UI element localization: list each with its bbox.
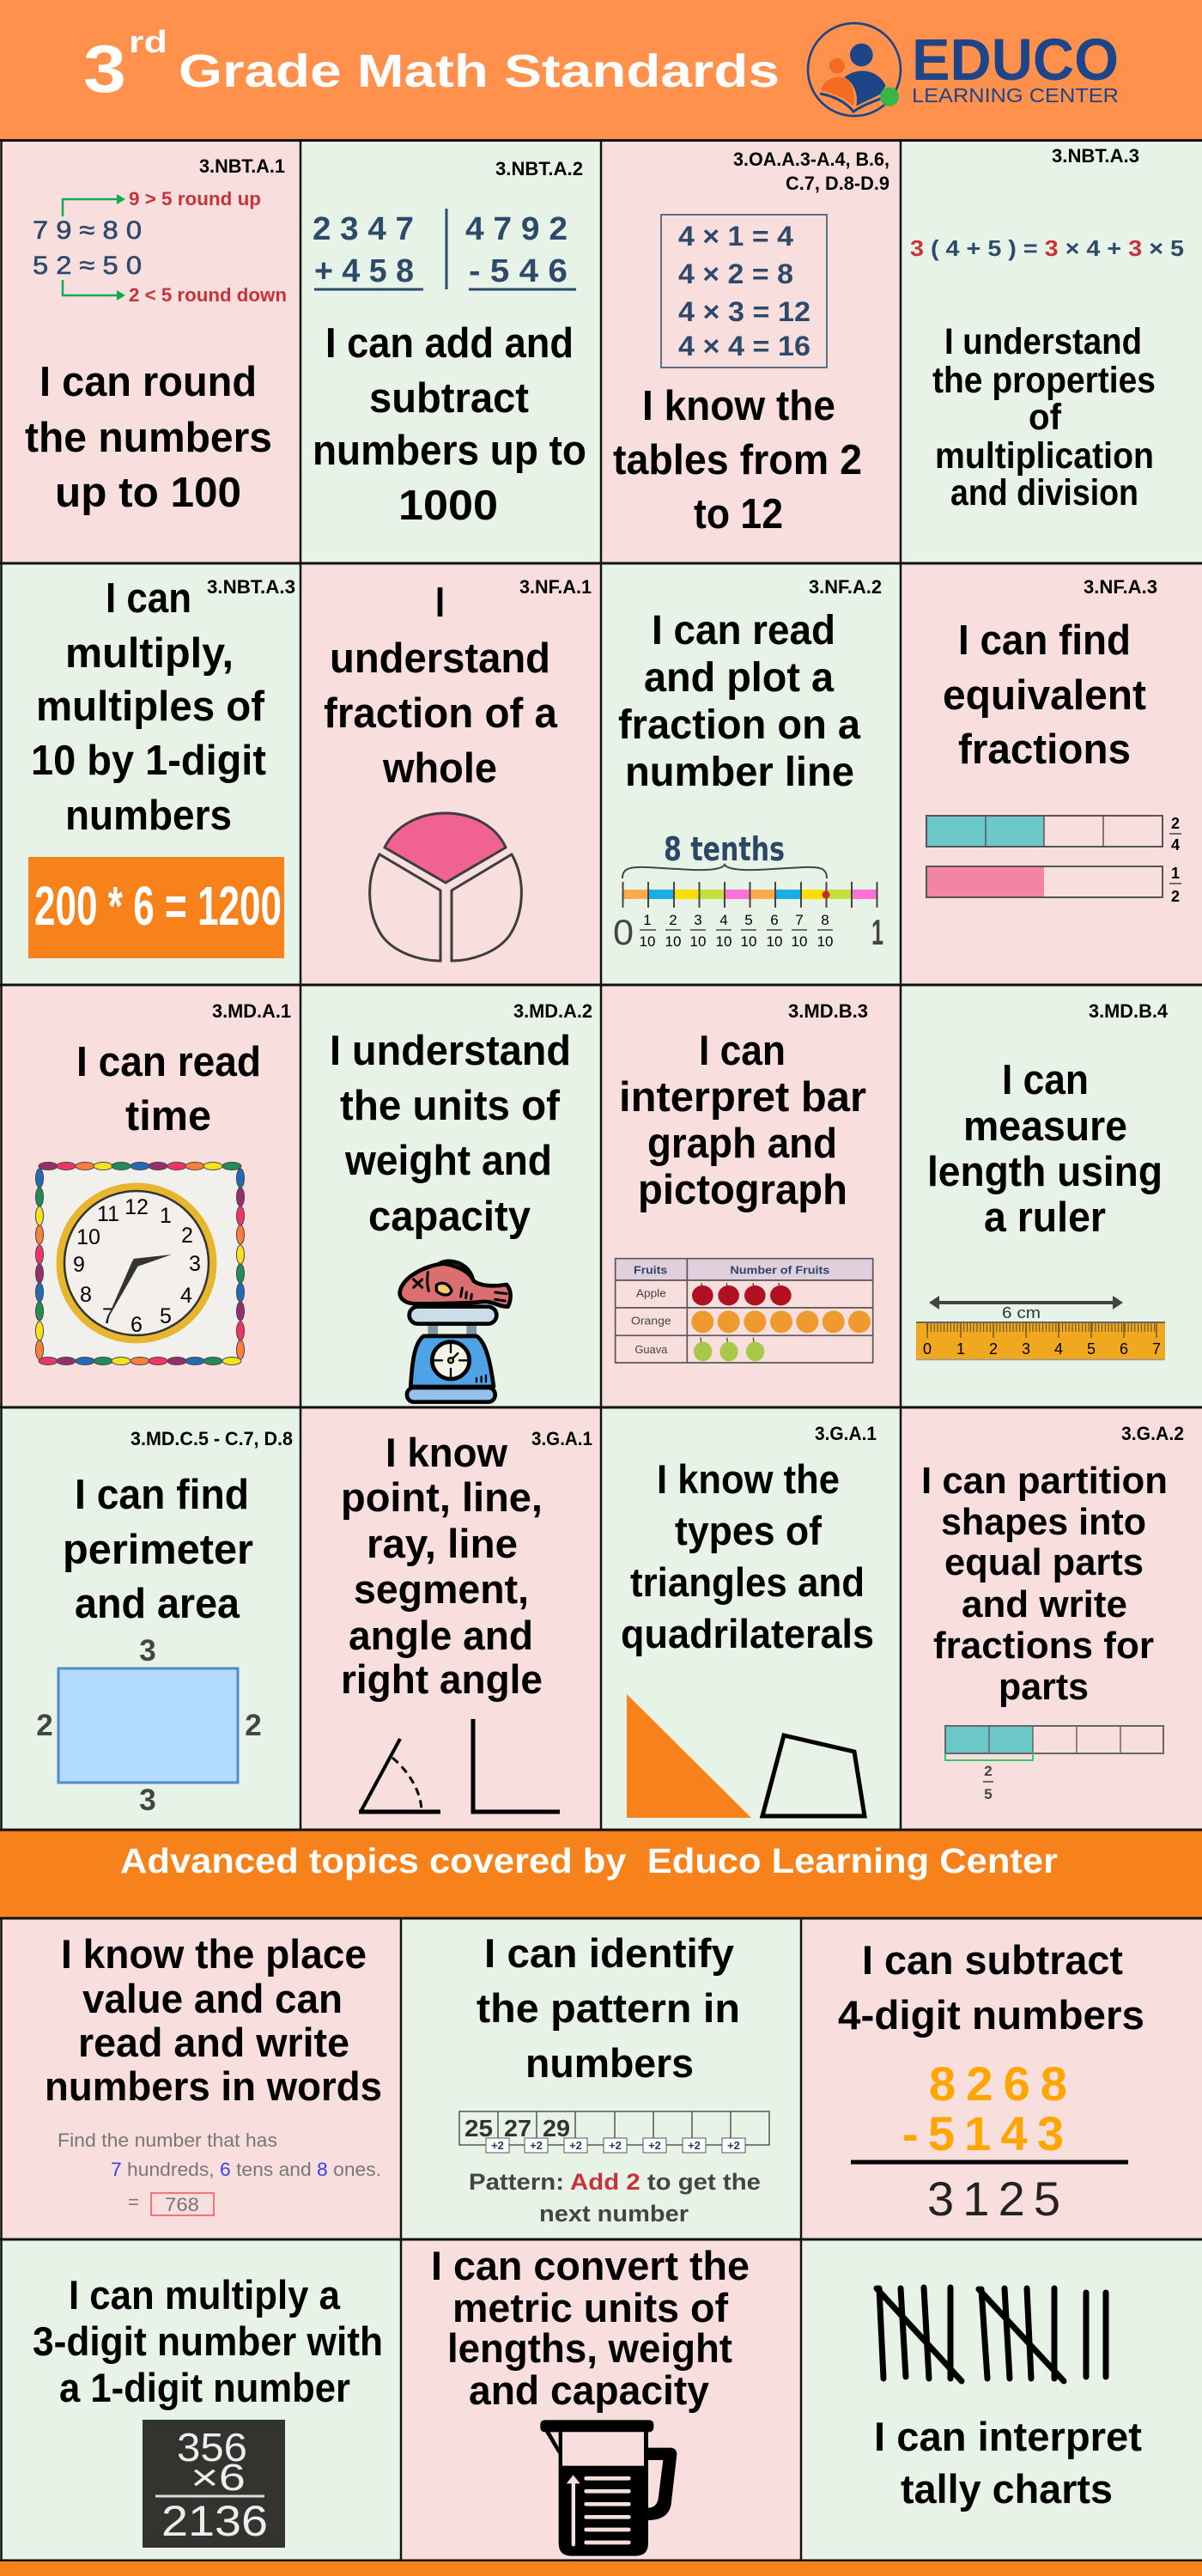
statement: fractions [958,726,1131,773]
panel: multiply 3-digit numbers [0,2239,401,2561]
statement: I can subtract [862,1937,1123,1983]
ruler with 6 cm arrow: 7 [1152,1340,1161,1358]
clock in beaded frame: 11 [97,1202,119,1226]
standard code: 3.NBT.A.3 [207,576,295,598]
times table box [661,215,827,368]
statement: I can [1002,1057,1089,1103]
pictograph table: Fruits [634,1264,667,1276]
statement: I can find [958,617,1131,664]
fraction bars: 4 [1171,836,1180,854]
statement [33,2272,383,2410]
statement: numbers in words [45,2063,382,2109]
standard code: C.7, D.8-D.9 [786,173,889,194]
rounding diagram: 2 < 5 round down [129,284,287,306]
statement: numbers [65,793,232,839]
statement: triangles and [630,1559,865,1605]
statement: quadrilaterals [621,1611,874,1656]
statement [874,2414,1142,2512]
number line diagram: 10 [741,933,756,950]
statement: lengths, weight [447,2325,732,2371]
statement: and division [950,472,1138,513]
statement: tables from 2 [613,437,862,483]
title: 3 [83,31,126,106]
standard code: 3.MD.C.5 - C.7, D.8 [131,1428,293,1449]
statement: I understand [944,321,1142,362]
number line diagram: 0 [613,912,634,952]
number line diagram: 6 [770,912,779,928]
statement: fraction on a [618,702,860,748]
statement: I know the [642,383,835,429]
statement: time [125,1093,211,1139]
statement: ray, line [367,1521,518,1566]
panel: tally charts [801,2239,1202,2561]
statement [932,321,1156,513]
panel: place value [0,1918,401,2239]
standard code: 3.NF.A.1 [519,576,592,598]
clock in beaded frame: 7 [102,1304,114,1328]
number line diagram: 10 [665,933,681,950]
chalkboard sum: ×6 [191,2457,246,2499]
statement [25,359,272,516]
standard code: 3.NF.A.2 [809,576,882,598]
panel: points lines and angles [300,1407,601,1830]
statement: multiplication [935,435,1154,477]
chalkboard sum [143,2420,285,2548]
clock in beaded frame: 10 [76,1225,100,1249]
number line diagram: 8 tenths [664,830,785,868]
orange equation box [28,857,284,958]
labelled rectangle: 2 [245,1709,262,1742]
statement [621,1456,874,1656]
pictograph table [616,1259,873,1363]
panel: fraction of a whole [300,563,601,985]
pictograph table: Number of Fruits [730,1264,829,1276]
standard code: 3.G.A.1 [815,1423,877,1444]
labelled rectangle: 3 [139,1634,156,1668]
statement [330,1028,571,1240]
statement: to 12 [694,491,783,538]
statement: I know the [657,1456,840,1502]
statement [477,1930,740,2086]
statement: a 1-digit number [59,2365,350,2410]
subtraction sum: - 5 1 4 3 [902,2106,1064,2160]
icon: triangle [627,1694,751,1818]
number line diagram: 1 [643,912,652,928]
statement: I can [106,575,191,622]
statement: I can read [652,608,835,653]
pattern strip: +2 [491,2139,504,2152]
standard code: 3.G.A.1 [531,1428,592,1449]
pictograph table: Apple [636,1288,666,1300]
clock in beaded frame: 6 [131,1313,143,1337]
labelled rectangle: 3 [139,1783,156,1817]
statement: equivalent [943,672,1146,719]
statement: metric units of [452,2285,728,2330]
panel: subtract 4-digit numbers [801,1918,1202,2239]
statement: I can interpret [874,2414,1142,2459]
statement [921,1460,1168,1708]
statement: 3-digit number with [33,2318,383,2364]
panel: measure with ruler [902,985,1202,1407]
panel: properties [902,140,1202,563]
labelled rectangle: 2 [36,1709,53,1742]
statement: graph and [647,1121,837,1167]
number line diagram: 10 [792,933,807,950]
ruler with 6 cm arrow: 5 [1087,1340,1096,1358]
statement [63,1472,253,1627]
statement: I can read [76,1039,261,1085]
statement: subtract [369,375,529,422]
fraction bars: 2 [1171,888,1180,905]
number line diagram: 7 [795,912,804,928]
statement: perimeter [63,1527,253,1573]
statement: I understand [330,1028,571,1074]
addition and subtraction sums: - 5 4 6 [469,253,568,289]
statement: read and write [78,2020,349,2065]
addition and subtraction sums: + 4 5 8 [314,253,414,289]
statement: right angle [341,1656,543,1702]
times table box: 4 × 1 = 4 [678,221,793,252]
number line diagram [613,830,883,952]
logo: Educo Learning Center: LEARNING CENTER [912,84,1119,106]
number line diagram: 10 [640,933,655,950]
times table box: 4 × 4 = 16 [678,331,810,361]
times table box: 4 × 3 = 12 [678,296,810,327]
icon: tally marks [877,2287,1106,2381]
icon: angle and right angle [359,1719,560,1812]
statement: number line [625,750,854,795]
clock in beaded frame: 4 [180,1284,192,1308]
statement: measure [963,1103,1127,1150]
statement: I can find [75,1472,249,1518]
panel: number line [601,563,902,985]
pattern strip: +2 [609,2139,622,2152]
statement: I can convert the [431,2243,750,2288]
pattern strip: 29 [543,2115,570,2142]
panel: multiply multiples of 10 [0,563,300,985]
ruler with 6 cm arrow: 6 cm [1002,1304,1041,1321]
clock in beaded frame: 12 [124,1195,149,1219]
ruler with 6 cm arrow: 1 [956,1340,965,1358]
statement: a ruler [984,1194,1106,1241]
statement: capacity [368,1194,531,1240]
statement: of [1029,397,1062,438]
place value question: 768 [165,2194,199,2215]
statement: weight and [344,1138,552,1184]
standard code [733,149,889,194]
statement [613,383,862,538]
statement: understand [330,635,550,682]
number line diagram: 5 [744,912,753,928]
rounding diagram: 9 > 5 round up [129,188,261,210]
standard code: 3.MD.B.3 [788,1000,868,1022]
statement: whole [382,745,497,792]
statement: tally charts [901,2466,1113,2512]
statement: I can partition [921,1460,1168,1502]
statement [618,608,860,795]
statement [76,1039,261,1139]
pattern strip [459,2111,769,2153]
header banner [0,0,1202,140]
pictograph table: Guava [634,1344,668,1356]
addition and subtraction sums: 2 3 4 7 [313,211,414,247]
clock in beaded frame [36,1163,244,1365]
clock in beaded frame: 8 [80,1283,92,1307]
statement: I know [385,1430,507,1475]
statement: and write [962,1583,1127,1625]
panel: perimeter and area [0,1407,300,1830]
partitioned bar with two fifths [945,1726,1163,1802]
ruler with 6 cm arrow: 6 [1120,1340,1128,1358]
standard code: 3.OA.A.3-A.4, B.6, [733,149,889,170]
panel: read time [0,985,300,1407]
statement: I can [699,1028,786,1074]
statement: the numbers [25,415,272,461]
standard code: 3.NBT.A.2 [495,158,583,179]
subtraction sum [851,2057,1128,2226]
title: Grade Math Standards [179,46,780,97]
pattern caption: next number [539,2201,689,2227]
statement: the properties [932,360,1156,401]
statement [313,320,586,529]
partitioned bar with two fifths: 2 [984,1763,993,1779]
distributive equation: 3 ( 4 + 5 ) = 3 × 4 + 3 × 5 [910,235,1184,261]
statement: value and can [82,1976,343,2021]
statement: multiples of [36,683,265,730]
standard code: 3.MD.A.1 [212,1000,291,1022]
statement: shapes into [941,1501,1146,1543]
clock in beaded frame: 5 [160,1304,172,1328]
statement: I can identify [484,1930,734,1976]
ruler with 6 cm arrow: 2 [989,1340,998,1358]
statement [943,617,1146,773]
chalkboard sum: 2136 [161,2497,268,2545]
statement [324,580,558,792]
title: rd [129,24,167,59]
statement: and capacity [469,2367,709,2413]
rounding diagram: 7 9 ≈ 8 0 [33,216,142,245]
pattern strip: 27 [504,2115,531,2142]
statement: 4-digit numbers [838,1992,1144,2038]
panel: bar graph and pictograph [601,985,902,1407]
number line diagram: 10 [690,933,706,950]
panel: partition shapes [902,1407,1202,1830]
panel: equivalent fractions [902,563,1202,985]
statement: I can add and [325,320,574,367]
panel: convert metric units [401,2239,801,2561]
rounding diagram: 5 2 ≈ 5 0 [33,252,142,280]
number line diagram: 4 [719,912,728,928]
panel: add and subtract [300,140,601,563]
pattern caption [469,2169,761,2227]
fraction bars: 1 [1171,865,1180,882]
statement: types of [675,1508,822,1553]
statement: parts [999,1666,1089,1708]
statement: angle and [349,1613,533,1658]
clock in beaded frame: 9 [73,1253,85,1277]
pie with one third shaded [370,813,521,961]
addition and subtraction sums: 4 7 9 2 [465,211,568,247]
statement [838,1937,1144,2038]
ruler with 6 cm arrow: 3 [1022,1340,1030,1358]
statement [619,1028,866,1213]
number line diagram: 1 [871,912,883,952]
place value question [58,2129,381,2215]
statement: I can round [39,359,257,405]
statement [431,2243,750,2413]
statement: equal parts [944,1541,1144,1583]
orange equation box: 200 * 6 = 1200 [34,875,282,937]
standard code: 3.G.A.2 [1121,1423,1184,1444]
standard code: 3.NF.A.3 [1084,576,1157,598]
number line diagram: 10 [767,933,782,950]
statement: multiply, [65,630,234,677]
fraction bars: 2 [1171,815,1180,832]
number line diagram: 10 [716,933,732,950]
icon: fish on kitchen scale [400,1261,511,1402]
addition and subtraction sums [313,209,576,289]
labelled rectangle [36,1634,262,1817]
statement: numbers [525,2040,694,2086]
standard code: 3.MD.A.2 [513,1000,592,1022]
panel: round numbers [0,140,300,563]
number line diagram: 3 [694,912,702,928]
statement: the units of [340,1083,561,1129]
statement: point, line, [341,1474,543,1520]
partitioned bar with two fifths: 5 [984,1786,993,1802]
statement [927,1057,1163,1241]
standard code: 3.NBT.A.3 [1052,145,1139,167]
panel: number patterns [401,1918,801,2239]
ruler with 6 cm arrow [916,1296,1165,1360]
rounding diagram [33,188,287,306]
standard code: 3.NBT.A.1 [199,155,285,177]
place value question: 7 hundreds, 6 tens and 8 ones. [111,2159,381,2180]
panel: triangles and quadrilaterals [601,1407,902,1830]
statement: and plot a [644,655,834,701]
statement: 1000 [398,483,498,529]
ruler with 6 cm arrow: 4 [1054,1340,1063,1358]
icon: measuring jug [540,2420,677,2556]
statement [341,1430,543,1702]
statement [31,575,266,839]
statement: segment, [354,1566,529,1612]
times table box: 4 × 2 = 8 [678,258,793,289]
pattern strip: +2 [530,2139,543,2152]
standard code: 3.MD.B.4 [1089,1000,1169,1022]
section banner: advanced topics: Advanced topics covered by Educo Learning Center [120,1841,1058,1880]
statement: interpret bar [619,1074,866,1121]
statement: I [435,580,445,626]
statement: fractions for [933,1625,1154,1667]
statement: I can multiply a [69,2272,341,2318]
pattern strip: +2 [569,2139,582,2152]
statement: pictograph [638,1167,847,1213]
pattern caption: Pattern: Add 2 to get the [469,2169,761,2195]
pattern strip: 25 [464,2115,493,2142]
statement: fraction of a [324,690,558,737]
statement: the pattern in [477,1985,740,2031]
statement [45,1931,382,2109]
subtraction sum: 3 1 2 5 [927,2172,1060,2226]
statement: I know the place [61,1931,367,1977]
statement: and area [75,1581,240,1627]
statement: up to 100 [55,470,241,516]
pattern strip: +2 [727,2139,740,2152]
icon: quadrilateral [762,1735,865,1816]
title [83,24,780,106]
pattern strip: +2 [688,2139,701,2152]
clock in beaded frame: 1 [160,1204,172,1228]
fraction bars [926,815,1181,905]
clock in beaded frame: 3 [189,1252,201,1276]
panel: times tables [601,140,902,563]
section banner: advanced topics [0,1830,1202,1918]
number line diagram: 10 [817,933,833,950]
ruler with 6 cm arrow: 0 [923,1340,932,1358]
panel: weight and capacity [300,985,601,1407]
pattern strip: +2 [648,2139,661,2152]
place value question: = [128,2191,139,2213]
logo: Educo Learning Center [808,23,1119,116]
statement: 10 by 1-digit [31,738,266,784]
chalkboard sum: 356 [177,2425,247,2470]
statement: numbers up to [313,428,586,474]
subtraction sum: 8 2 6 8 [929,2057,1067,2111]
number line diagram: 8 [821,912,829,928]
place value question: Find the number that has [58,2129,277,2151]
number line diagram: 2 [669,912,677,928]
clock in beaded frame: 2 [181,1224,193,1248]
statement: length using [927,1149,1163,1195]
logo: Educo Learning Center: EDUCO [912,27,1119,93]
pictograph table: Orange [631,1315,671,1327]
